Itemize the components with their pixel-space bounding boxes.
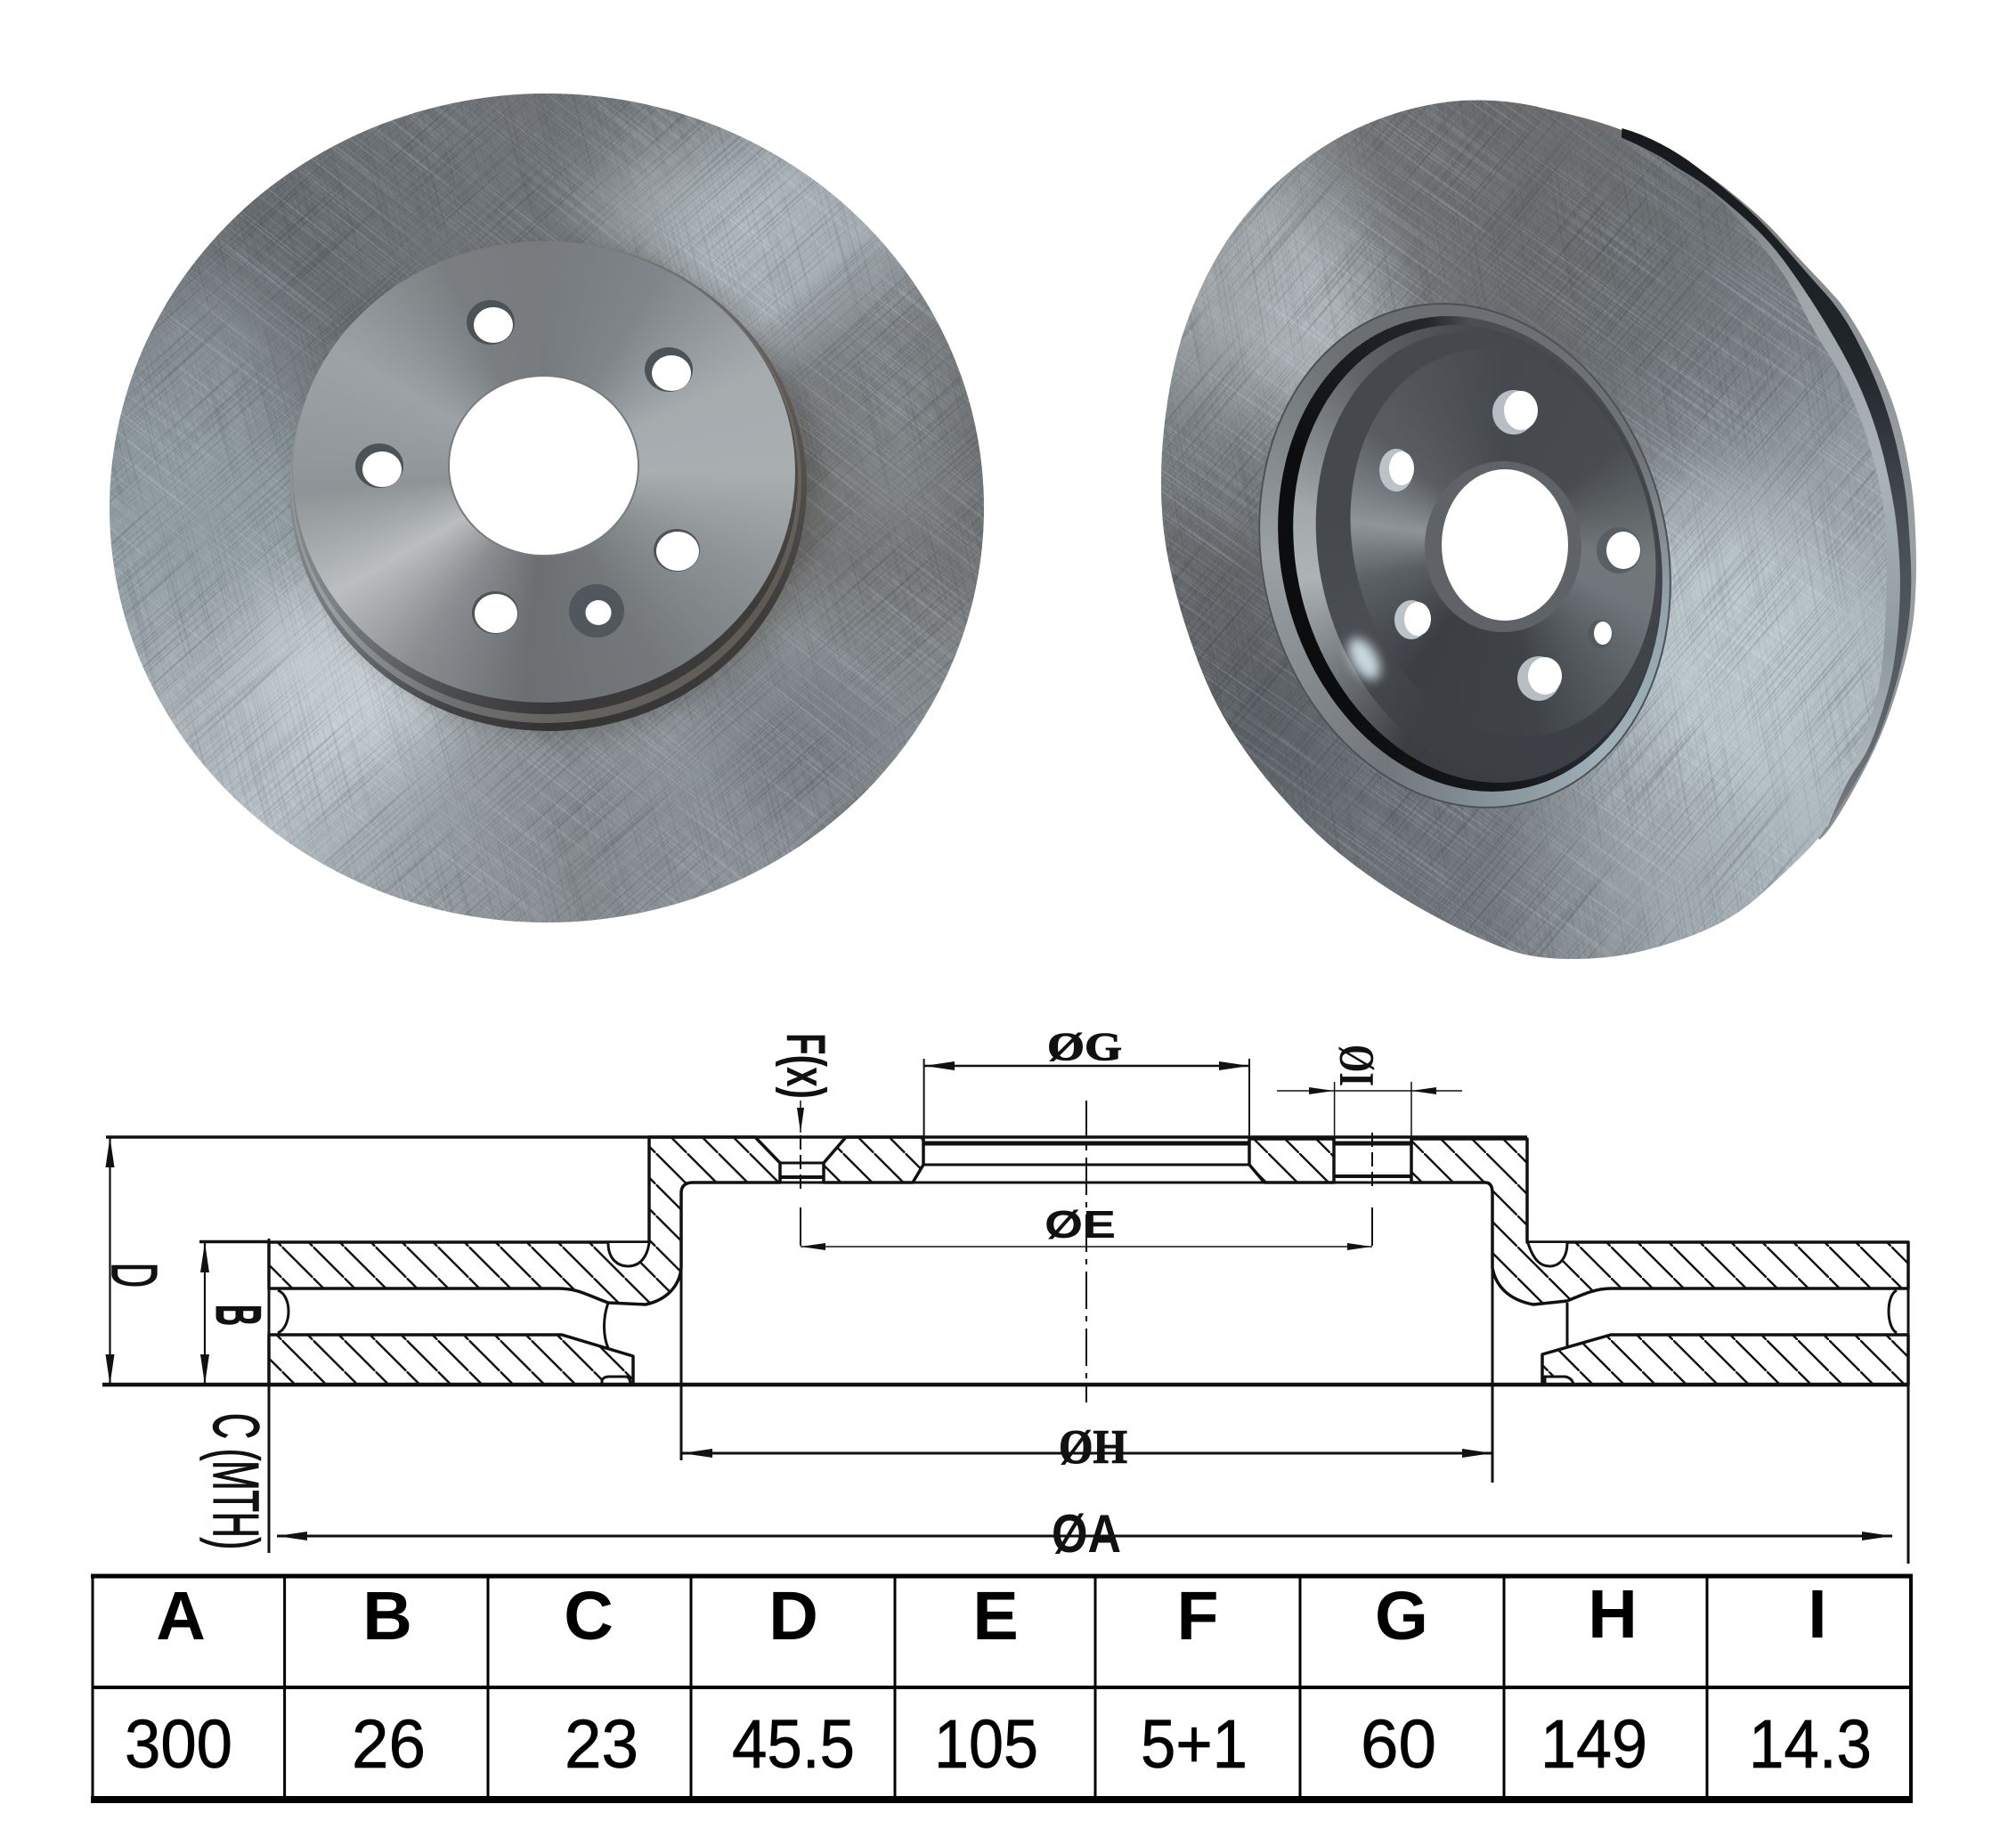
rim groove — [1603, 128, 1911, 827]
dimension label: ØH: ØH — [1059, 1420, 1127, 1474]
header row: dimension letters: D — [768, 1578, 818, 1654]
disc machining scratches — [1161, 100, 1887, 959]
disc machining scratches — [110, 93, 984, 922]
section details: fillets, vents, bores — [278, 1143, 1897, 1385]
value row: dimension values: 300 — [125, 1706, 232, 1783]
value row: dimension values: 23 — [565, 1706, 638, 1783]
extension lines and baselines — [102, 1059, 1908, 1564]
dimension label: C (MTH): C (MTH) — [199, 1413, 271, 1549]
hub skirt shadow line — [292, 241, 798, 714]
centre bore — [1442, 469, 1568, 621]
dimension label: D: D — [98, 1263, 169, 1288]
value row: dimension values: 14.3 — [1749, 1706, 1872, 1783]
bolt holes — [355, 300, 700, 638]
bolt holes and highlights — [1341, 390, 1641, 701]
value row: dimension values: 26 — [352, 1706, 426, 1783]
rim chamfer — [1603, 138, 1900, 827]
hub skirt highlight line — [291, 241, 801, 723]
dimension label: ØA: ØA — [1052, 1504, 1121, 1564]
hatched section: left rotor and hat wall — [269, 1137, 923, 1385]
dimension label: F(x): F(x) — [775, 1033, 836, 1099]
header row: dimension letters: I — [1808, 1576, 1827, 1653]
hat flat face — [1311, 317, 1695, 769]
hatched section: right rotor and hat wall — [1249, 1139, 1908, 1385]
header row: dimension letters: H — [1588, 1576, 1638, 1653]
value row: dimension values: 149 — [1540, 1706, 1647, 1783]
value row: dimension values: 60 — [1361, 1706, 1436, 1783]
hat bowl bright wall — [1246, 286, 1708, 822]
header row: dimension letters: C — [564, 1578, 614, 1654]
hub skirt outer edge — [289, 241, 807, 731]
rim outer band — [1536, 107, 1916, 840]
hat ring — [1206, 258, 1724, 853]
header row: dimension letters: G — [1375, 1578, 1428, 1654]
header row: dimension letters: F — [1176, 1578, 1219, 1654]
disc friction face — [1158, 80, 1923, 962]
outer rim edge with groove and chamfer — [1542, 108, 1916, 840]
hub mounting face — [293, 241, 795, 703]
header row: dimension letters — [156, 1576, 1827, 1654]
dimension arrows — [110, 1066, 1892, 1536]
hat bowl dark wall — [1271, 296, 1705, 813]
dimension label: ØI: ØI — [1329, 1044, 1384, 1086]
centre lines — [801, 1101, 1372, 1402]
dimension label: ØG: ØG — [1047, 1025, 1122, 1069]
photo: brake disc, rear side at an angle — [1161, 100, 1916, 959]
photo: brake disc, hat side facing viewer — [110, 93, 984, 922]
hub boss ring — [1425, 461, 1581, 632]
header row: dimension letters: E — [972, 1578, 1019, 1654]
disc friction face — [110, 93, 984, 922]
centre bore — [450, 376, 638, 554]
value row: dimension values: 45.5 — [732, 1706, 855, 1783]
black vent gap — [1229, 275, 1711, 833]
header row: dimension letters: A — [156, 1578, 206, 1654]
technical cross-section drawing: B — [202, 1305, 273, 1326]
dimension label: ØE: ØE — [1045, 1203, 1116, 1247]
header row: dimension letters: B — [362, 1578, 412, 1654]
value row: dimension values — [125, 1706, 1872, 1783]
table grid — [91, 1574, 1913, 1803]
value row: dimension values: 5+1 — [1141, 1706, 1248, 1783]
value row: dimension values: 105 — [934, 1706, 1038, 1783]
